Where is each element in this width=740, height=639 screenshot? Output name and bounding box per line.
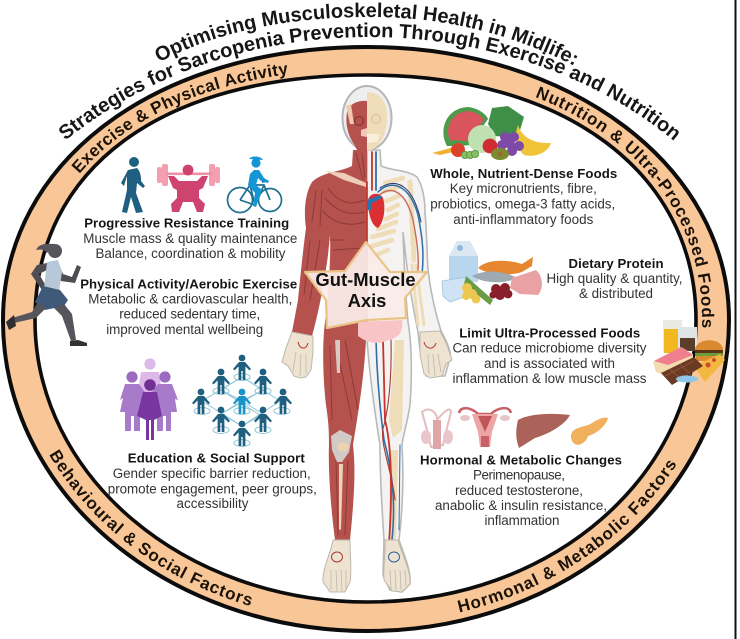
text block: progressive resistance training: Balance, coordination & mobility bbox=[96, 246, 286, 261]
bones: ribcage bbox=[372, 178, 424, 325]
fingers, toes and foot vessels bbox=[293, 342, 441, 591]
icon: weightlifter bbox=[157, 164, 220, 212]
title: Optimising Musculoskeletal Health in Midlife: bbox=[156, 2, 578, 66]
icon: uterus bbox=[459, 408, 511, 447]
bones: femur and shin bbox=[389, 340, 404, 540]
text block: whole foods: Key micronutrients, fibre, bbox=[450, 181, 597, 196]
icon: ultra-processed foods bbox=[653, 320, 725, 385]
text block: physical activity: Metabolic & cardiovascular health, bbox=[88, 292, 292, 306]
right side outline and skin bbox=[367, 150, 450, 592]
text block: progressive resistance training: Progressive Resistance Training bbox=[84, 216, 289, 230]
gut bbox=[358, 320, 402, 343]
text block: whole foods: anti-inflammatory foods bbox=[453, 212, 594, 227]
text block: hormonal and metabolic changes: inflammation bbox=[484, 513, 560, 528]
text block: education and social support: Education & Social Support bbox=[128, 451, 305, 466]
text block: limit ultra-processed foods: inflammation & low muscle mass bbox=[452, 371, 647, 386]
tendons and collar bbox=[325, 171, 366, 187]
text block: education and social support: accessibility bbox=[176, 496, 249, 511]
left muscles bbox=[292, 150, 367, 540]
band label: hormonal: Hormonal & Metabolic Factors bbox=[458, 460, 676, 612]
text block: hormonal and metabolic changes: Perimenopause, bbox=[473, 468, 565, 482]
icon: organs bbox=[421, 408, 608, 449]
title: Strategies for Sarcopenia Prevention Through Exercise and Nutrition bbox=[59, 22, 679, 140]
text block: whole foods: probiotics, omega-3 fatty acids, bbox=[430, 196, 615, 212]
anatomical body figure bbox=[282, 86, 452, 592]
icon: walker bbox=[121, 157, 145, 213]
icon: pancreas bbox=[571, 418, 608, 445]
text block: whole foods: Whole, Nutrient-Dense Foods bbox=[430, 166, 617, 181]
text block: limit ultra-processed foods: Can reduce microbiome diversity bbox=[452, 341, 647, 356]
text block: progressive resistance training bbox=[83, 216, 297, 261]
text block: dietary protein: High quality & quantity, bbox=[546, 271, 682, 286]
text block: hormonal and metabolic changes: Hormonal & Metabolic Changes bbox=[420, 453, 622, 468]
text block: dietary protein: Dietary Protein bbox=[568, 256, 664, 271]
text block: whole foods bbox=[430, 166, 617, 227]
icon: social network bbox=[192, 355, 292, 446]
text block: physical activity: reduced sedentary time, bbox=[119, 306, 260, 322]
text block: physical activity: improved mental wellbeing bbox=[106, 322, 263, 337]
band label: nutrition: Nutrition & Ultra-Processed Foods bbox=[536, 86, 714, 328]
icon: liver bbox=[516, 414, 570, 448]
text block: physical activity bbox=[80, 276, 297, 337]
text block: education and social support bbox=[108, 451, 317, 511]
icon: male reproductive bbox=[421, 409, 453, 449]
head bbox=[342, 86, 392, 155]
text block: dietary protein: & distributed bbox=[579, 286, 653, 301]
band label: exercise: Exercise & Physical Activity bbox=[71, 64, 288, 174]
text block: progressive resistance training: Muscle mass & quality maintenance bbox=[83, 231, 297, 246]
heart and vessels bbox=[338, 152, 423, 560]
text block: education and social support: Gender specific barrier reduction, bbox=[113, 466, 311, 481]
star: gut-muscle axis bbox=[305, 242, 427, 328]
muscle detail bbox=[304, 153, 365, 535]
text block: hormonal and metabolic changes: anabolic & insulin resistance, bbox=[435, 498, 607, 513]
star: gut-muscle axis: Axis bbox=[348, 290, 386, 311]
text block: hormonal and metabolic changes bbox=[420, 453, 622, 528]
text block: limit ultra-processed foods: Limit Ultra-Processed Foods bbox=[459, 326, 640, 341]
text block: limit ultra-processed foods: and is associated with bbox=[484, 356, 615, 371]
band label: behavioural: Behavioural & Social Factors bbox=[50, 449, 252, 606]
icon: cyclist bbox=[228, 156, 282, 212]
text block: limit ultra-processed foods bbox=[452, 326, 647, 386]
text block: hormonal and metabolic changes: reduced testosterone, bbox=[455, 483, 583, 498]
icon: women group bbox=[120, 358, 178, 440]
icon: runner bbox=[6, 244, 87, 346]
star: gut-muscle axis: Gut-Muscle bbox=[315, 269, 416, 290]
text block: physical activity: Physical Activity/Aerobic Exercise bbox=[80, 276, 297, 292]
icon: protein foods bbox=[442, 241, 542, 305]
icon: whole foods bbox=[432, 106, 551, 160]
text block: education and social support: promote engagement, peer groups, bbox=[108, 481, 317, 496]
text block: dietary protein bbox=[546, 256, 682, 301]
hands and feet bbox=[282, 331, 452, 592]
